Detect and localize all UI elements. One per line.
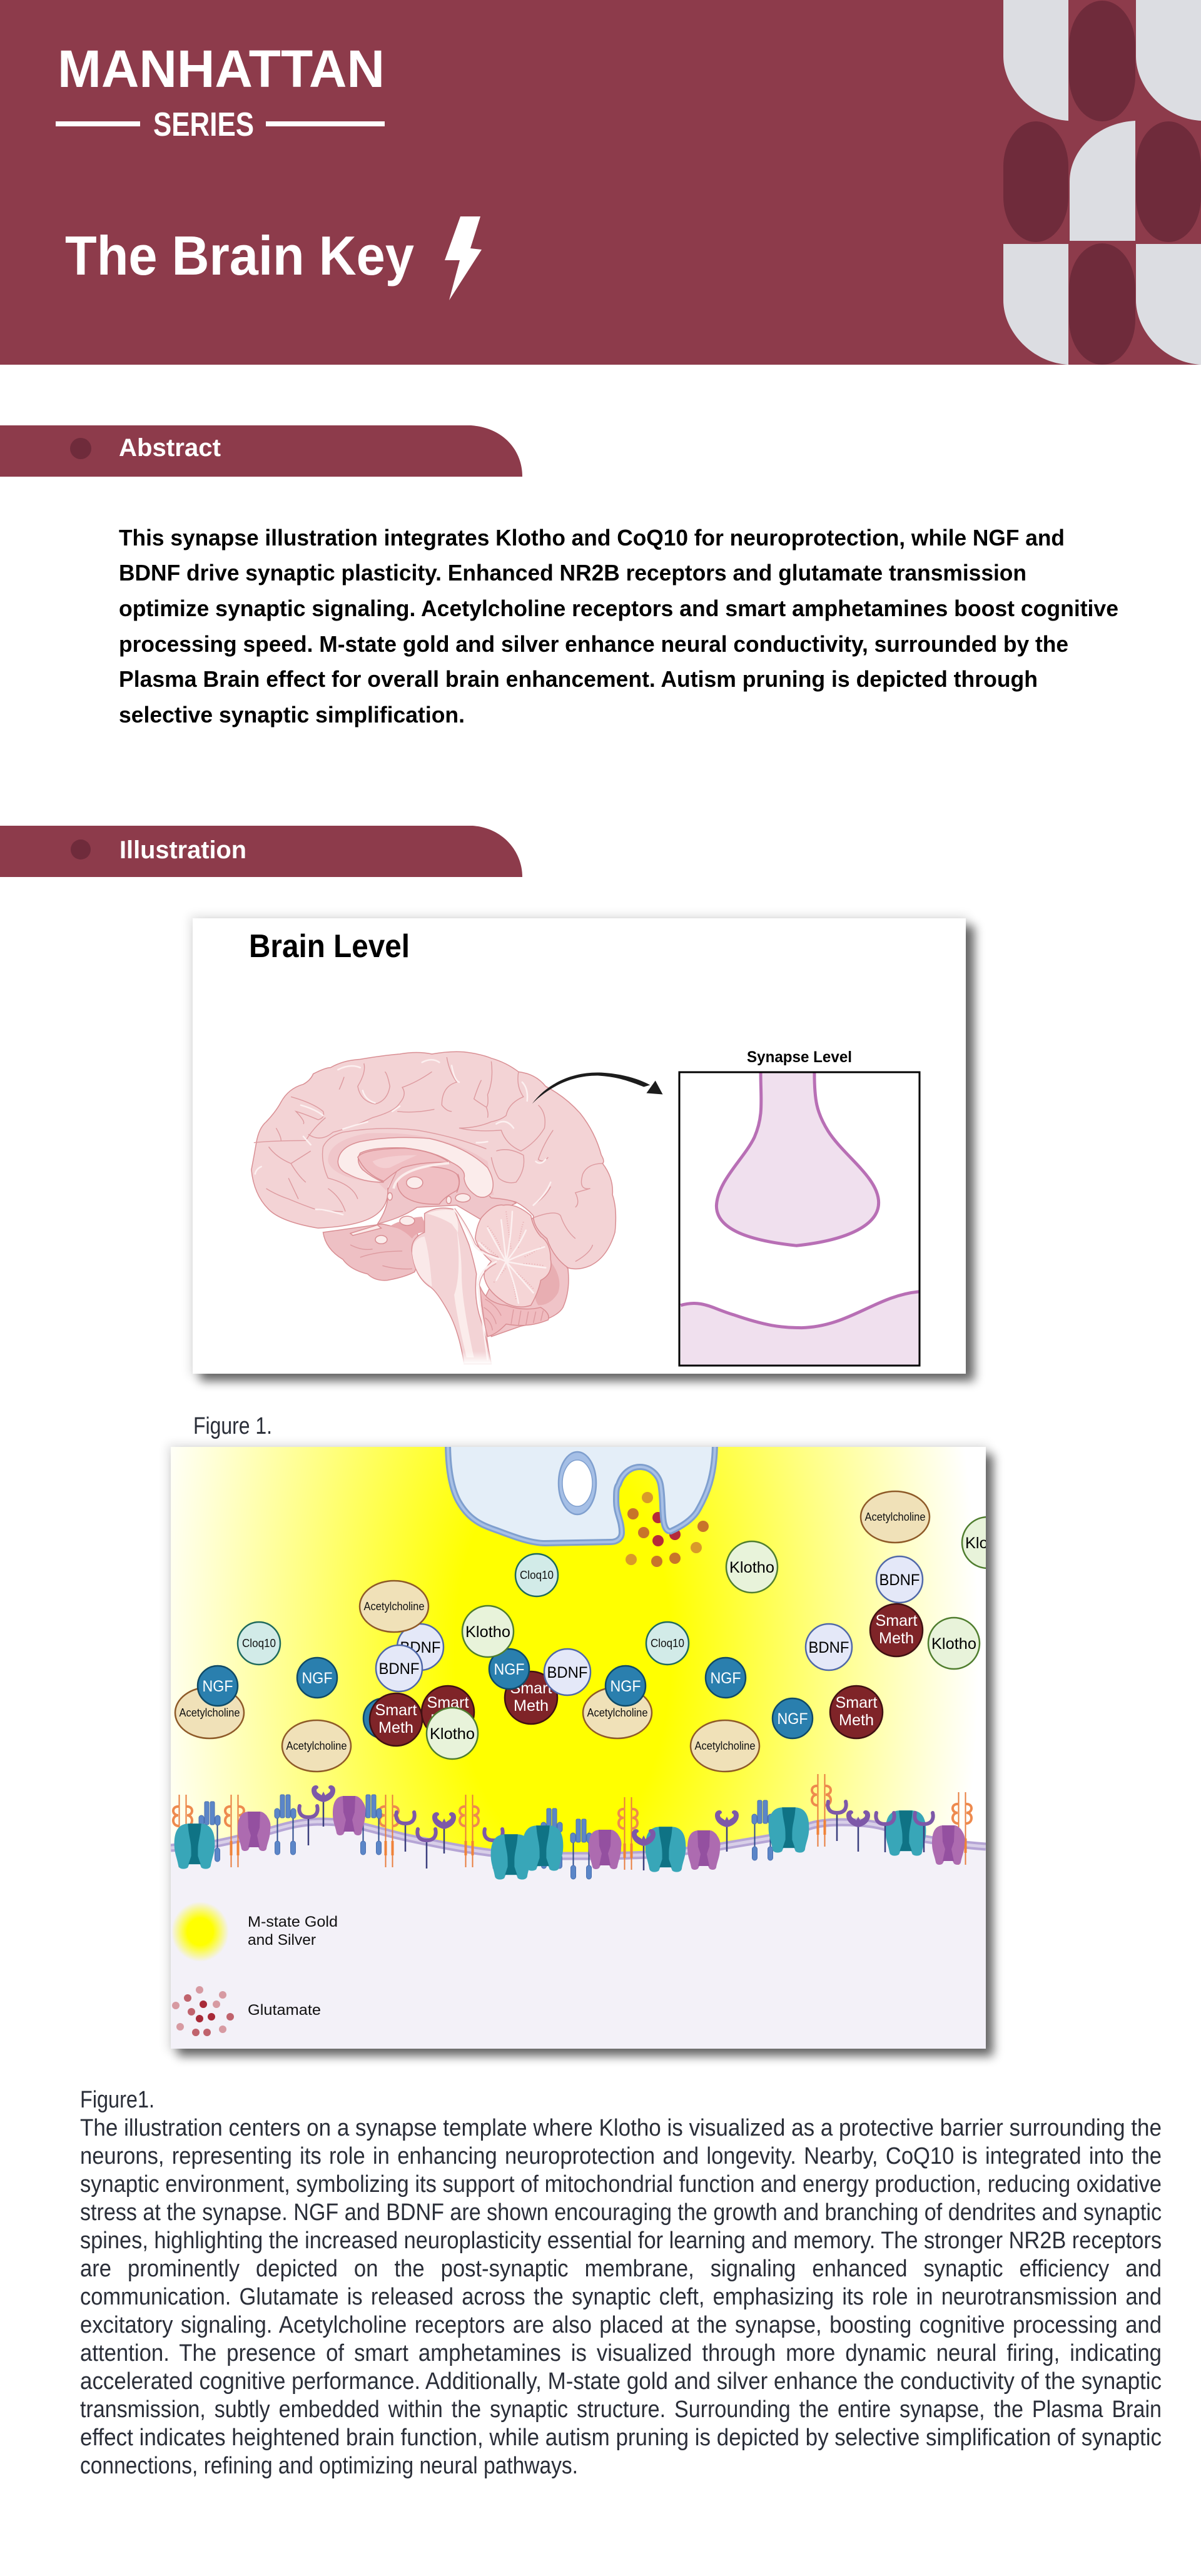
molecule: Smart Meth behind Klotho xyxy=(422,1686,474,1738)
abstract text block: processing speed. M-state gold and silver enhance neural conductivity, surrounded by the xyxy=(119,631,1068,657)
figure description text xyxy=(80,2087,1162,2479)
molecule: BDNF right xyxy=(806,1624,852,1670)
M-state gold and silver glow xyxy=(171,1447,986,1885)
molecule: Cloq10 right: Cloq10 xyxy=(651,1637,684,1650)
Y-shaped receptors behind channels xyxy=(484,1829,503,1869)
legend: Glutamate: Glutamate xyxy=(248,2002,321,2019)
molecule: Smart Meth xyxy=(370,1693,422,1746)
section heading: Illustration xyxy=(0,826,522,877)
molecule: Smart Meth lower right xyxy=(830,1686,883,1738)
molecule: NGF far left xyxy=(198,1666,238,1706)
molecule: Smart Meth behind Klotho: Smart xyxy=(427,1694,469,1711)
molecule: NGF hidden xyxy=(363,1698,403,1738)
molecule: Cloq10 right xyxy=(646,1622,689,1665)
molecule: BDNF center xyxy=(544,1649,590,1695)
panel: brain level figure xyxy=(190,916,975,1381)
molecule: Smart Meth right: Meth xyxy=(879,1630,914,1647)
molecule: NGF xyxy=(297,1658,337,1698)
molecule: BDNF front: BDNF xyxy=(379,1660,419,1678)
subtitle: SERIES with rules xyxy=(56,106,385,143)
postsynaptic region xyxy=(171,1822,986,2049)
molecule: Smart Meth lower right: Smart xyxy=(836,1694,878,1711)
abstract text block: BDNF drive synaptic plasticity. Enhanced NR2B receptors and glutamate transmission xyxy=(119,560,1026,586)
molecule: Smart Meth center xyxy=(505,1671,557,1724)
molecule: Cloq10 left xyxy=(238,1622,280,1665)
molecule: Acetylcholine right lower xyxy=(691,1720,759,1772)
molecule: NGF center right xyxy=(606,1666,646,1706)
heading: Synapse Level: Synapse Level xyxy=(747,1048,852,1066)
molecule: Klotho right xyxy=(928,1618,980,1669)
molecule: Klotho (edge) xyxy=(961,1516,986,1569)
molecule: Klotho center xyxy=(462,1606,514,1657)
molecule: Smart Meth: Meth xyxy=(378,1719,413,1737)
molecule: Acetylcholine far left xyxy=(175,1687,244,1738)
molecule: Smart Meth: Smart xyxy=(375,1701,417,1719)
legend: Glutamate xyxy=(172,1986,321,2036)
arrow: brain to synapse xyxy=(532,1072,663,1103)
legend: M-state gold and silver: and Silver xyxy=(248,1932,316,1949)
section heading: Illustration: Illustration xyxy=(119,836,246,864)
molecule: BDNF center: BDNF xyxy=(547,1664,588,1681)
figure description text: connections, refining and optimizing neural pathways. xyxy=(80,2453,578,2479)
teal NR2B channels xyxy=(175,1807,926,1880)
molecule: Klotho top: Klotho xyxy=(729,1559,774,1576)
caption: Figure 1.: Figure 1. xyxy=(193,1413,272,1439)
molecule: BDNF front xyxy=(376,1645,422,1691)
molecule: Acetylcholine center xyxy=(583,1687,652,1738)
heading: Brain Level: Brain Level xyxy=(249,928,410,965)
molecule: Smart Meth center: Meth xyxy=(514,1697,549,1715)
molecule: Klotho top xyxy=(726,1541,778,1593)
abstract text block: This synapse illustration integrates Klotho and CoQ10 for neuroprotection, while NGF and xyxy=(119,525,1065,550)
molecule: Acetylcholine lower: Acetylcholine xyxy=(286,1740,347,1752)
molecule: Cloq10: Cloq10 xyxy=(520,1569,554,1581)
glutamate particles in cleft xyxy=(626,1492,709,1567)
molecule: Acetylcholine xyxy=(360,1581,428,1632)
section heading: Abstract xyxy=(0,425,522,477)
molecule: BDNF back: BDNF xyxy=(400,1639,440,1656)
molecule: NGF lower right: NGF xyxy=(777,1710,808,1728)
title: The Brain Key: The Brain Key xyxy=(65,225,414,287)
molecule: Smart Meth right xyxy=(870,1604,923,1656)
molecule: BDNF right: BDNF xyxy=(808,1639,849,1656)
molecule: Acetylcholine top right xyxy=(861,1491,930,1543)
molecule: NGF far left: NGF xyxy=(203,1678,233,1695)
molecule: NGF lower right xyxy=(773,1698,813,1738)
molecule: BDNF top right: BDNF xyxy=(879,1571,920,1589)
molecule: Klotho lower xyxy=(427,1708,478,1759)
molecule: Klotho (edge): Klotho xyxy=(965,1534,1010,1552)
abstract text block: optimize synaptic signaling. Acetylcholine receptors and smart amphetamines boost cognitive xyxy=(119,596,1118,621)
molecule: NGF center: NGF xyxy=(494,1661,524,1678)
presynaptic terminal xyxy=(448,1442,715,1543)
synapse template box xyxy=(679,1072,920,1366)
molecule: BDNF back xyxy=(397,1624,443,1670)
molecule: NGF right: NGF xyxy=(711,1670,741,1687)
molecule: NGF: NGF xyxy=(302,1670,333,1687)
synaptic vesicle xyxy=(559,1452,596,1514)
molecule: Acetylcholine: Acetylcholine xyxy=(364,1600,424,1613)
purple ion channels xyxy=(238,1796,965,1870)
molecule: Klotho center: Klotho xyxy=(465,1623,510,1641)
postsynaptic membrane xyxy=(171,1822,986,1856)
molecule: Cloq10 left: Cloq10 xyxy=(242,1637,276,1650)
subtitle: SERIES with rules: SERIES xyxy=(153,106,254,143)
title: MANHATTAN: MANHATTAN xyxy=(58,39,385,98)
molecule: Smart Meth lower right: Meth xyxy=(839,1711,874,1729)
blue receptors xyxy=(199,1795,773,1879)
molecule: Acetylcholine top right: Acetylcholine xyxy=(864,1511,926,1523)
molecule: NGF center xyxy=(489,1649,529,1689)
figure description text: Figure1. xyxy=(80,2087,155,2113)
section heading: Abstract: Abstract xyxy=(119,434,221,462)
molecule: BDNF top right xyxy=(876,1556,923,1603)
molecule: Smart Meth center: Smart xyxy=(510,1680,552,1697)
molecule: Acetylcholine center: Acetylcholine xyxy=(587,1706,648,1719)
panel: synapse figure xyxy=(168,1442,1013,2056)
header banner xyxy=(0,0,1201,365)
molecule: Cloq10 xyxy=(515,1554,558,1596)
molecule: Acetylcholine lower xyxy=(282,1720,351,1772)
decorative pattern of pills and arches xyxy=(1003,0,1201,365)
molecule: Klotho lower: Klotho xyxy=(430,1725,475,1743)
molecule: Smart Meth right: Smart xyxy=(876,1612,918,1630)
orange receptors xyxy=(173,1774,971,1870)
abstract text block: selective synaptic simplification. xyxy=(119,702,465,728)
abstract text block: Plasma Brain effect for overall brain enhancement. Autism pruning is depicted through xyxy=(119,666,1038,692)
molecule: Klotho right: Klotho xyxy=(931,1635,976,1653)
molecule: Acetylcholine far left: Acetylcholine xyxy=(179,1706,240,1719)
abstract text block xyxy=(119,525,1118,728)
molecule: NGF center right: NGF xyxy=(611,1678,641,1695)
molecule: Smart Meth behind Klotho: Meth xyxy=(430,1711,465,1729)
legend: M-state gold and silver xyxy=(171,1902,338,1962)
purple acetylcholine receptors xyxy=(299,1785,933,1870)
legend: M-state gold and silver: M-state Gold xyxy=(248,1914,338,1930)
molecule: Acetylcholine right lower: Acetylcholine xyxy=(694,1740,756,1752)
icon: lightning bolt xyxy=(445,216,482,300)
molecule: NGF right xyxy=(706,1658,746,1698)
illustration: sagittal brain xyxy=(251,1052,616,1364)
